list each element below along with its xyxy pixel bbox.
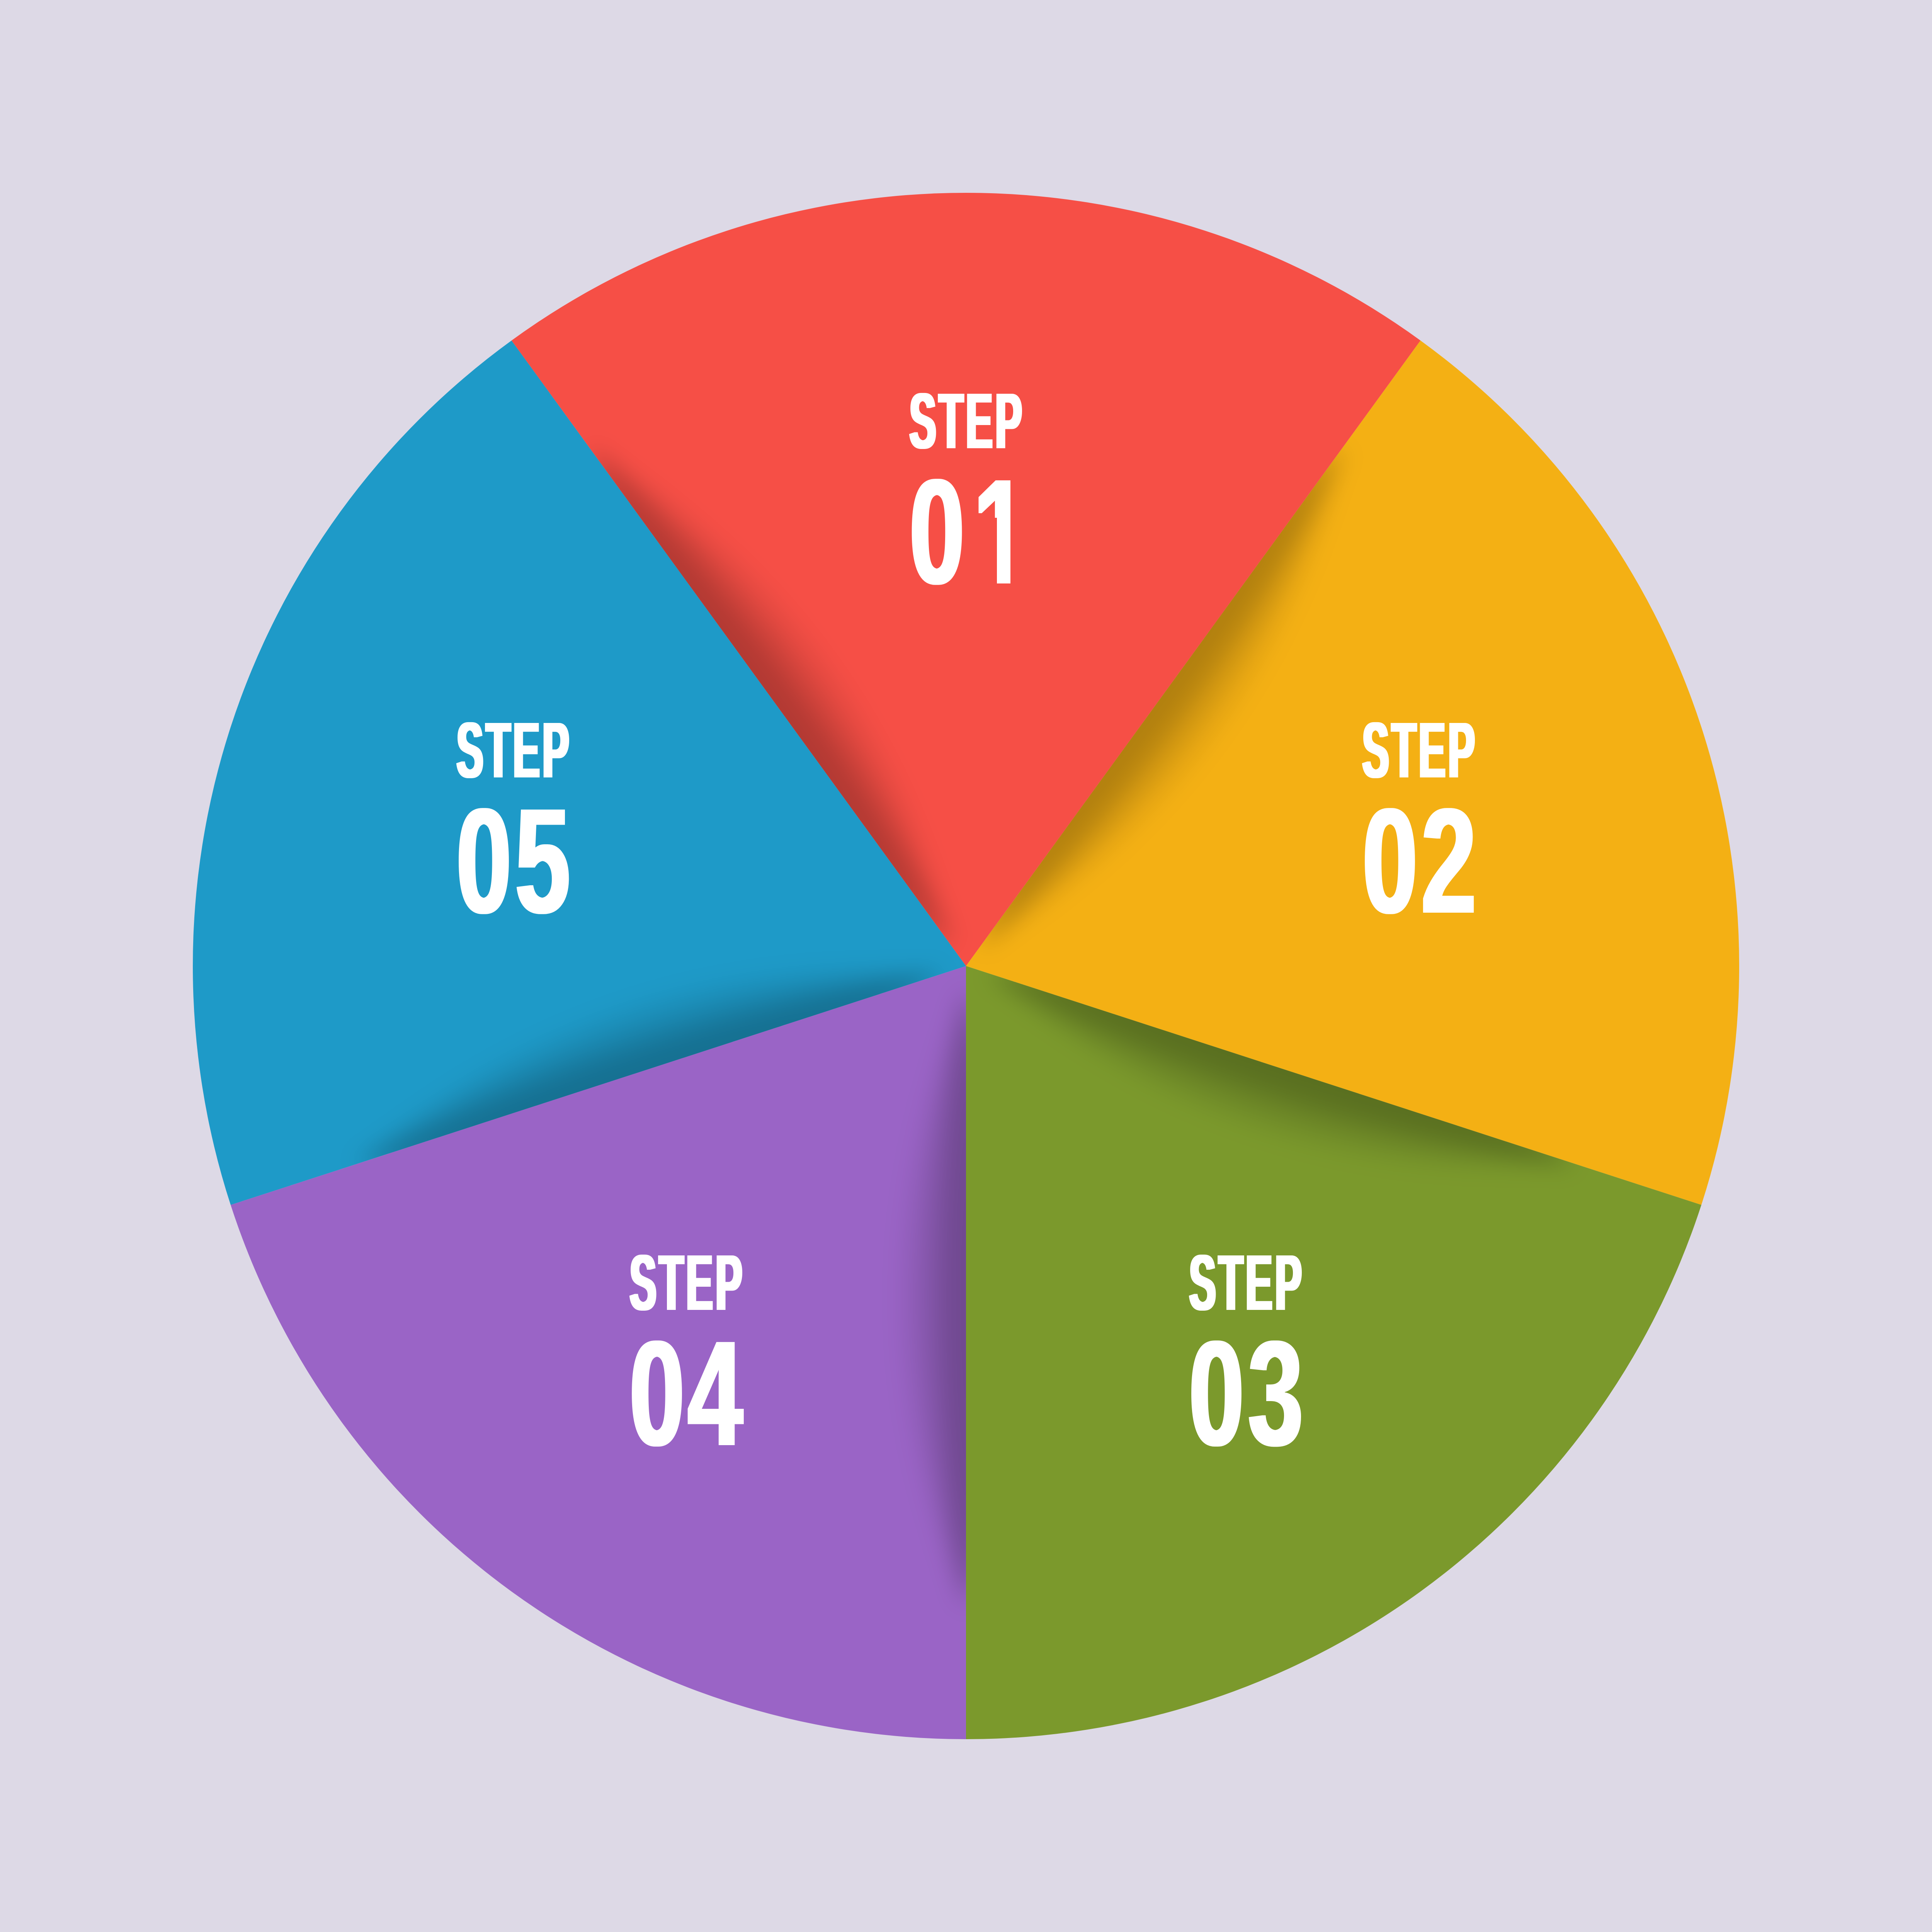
label: step 01 — [909, 393, 1022, 585]
label: step 04: 04 — [629, 1309, 743, 1477]
shadow on purple slice — [902, 989, 1030, 1607]
slice: blue — [193, 340, 966, 1205]
panel: step 01 — [512, 193, 1420, 985]
shadow on green slice — [968, 913, 1596, 1225]
shadow on blue slice — [336, 913, 964, 1225]
slice: green — [966, 966, 1701, 1739]
slice: purple — [231, 966, 966, 1739]
label: step 04: STEP — [630, 1239, 742, 1327]
slice: yellow — [966, 340, 1739, 1205]
label: step 03: STEP — [1189, 1239, 1302, 1327]
label: step 01: 01 — [910, 447, 1028, 616]
label: step 01: STEP — [910, 377, 1022, 465]
panel: step 02 — [928, 340, 1739, 1205]
pie chart infographic — [192, 193, 1739, 1739]
label: step 05: STEP — [457, 706, 569, 794]
label: step 02: STEP — [1362, 706, 1475, 794]
label: step 05: 05 — [456, 777, 570, 945]
panel: step 03 — [966, 913, 1701, 1739]
shadow on red slice — [592, 448, 956, 943]
label: step 02: 02 — [1362, 777, 1476, 945]
label: step 03: 03 — [1189, 1309, 1303, 1477]
shadow on yellow slice — [928, 410, 1395, 985]
slice: red — [512, 193, 1420, 966]
panel: step 05 — [193, 340, 966, 1225]
panel: step 04 — [231, 966, 1030, 1739]
